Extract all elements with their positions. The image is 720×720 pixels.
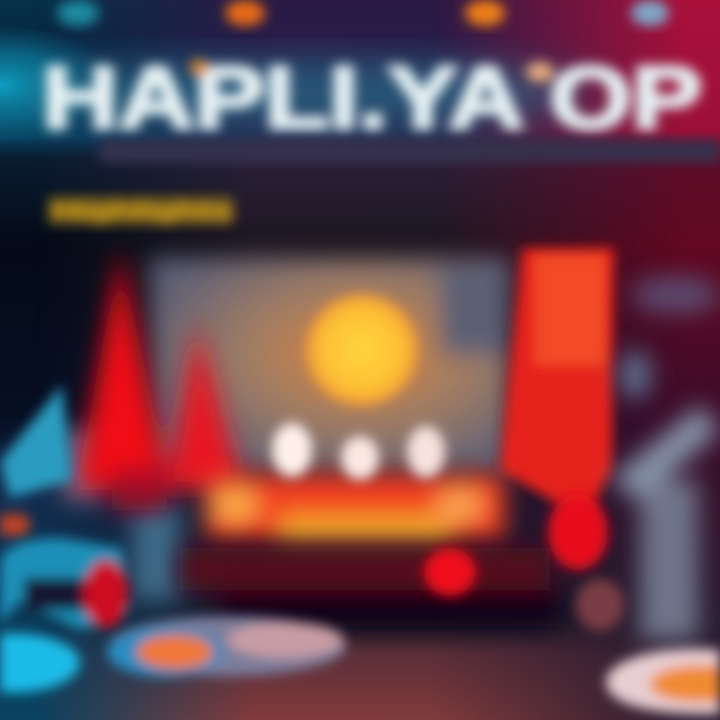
yellow label: Highlights <box>52 198 232 225</box>
left red peaks <box>76 250 244 510</box>
red lights <box>424 494 608 596</box>
left blue wedge <box>0 385 72 536</box>
right red block <box>500 248 614 520</box>
white blobs <box>272 423 445 480</box>
icon: sun <box>306 294 418 406</box>
title glow <box>30 62 590 122</box>
left cyan panel <box>0 538 128 630</box>
center panel <box>150 258 510 473</box>
divider strip <box>100 140 720 162</box>
top lights <box>57 0 669 26</box>
middle disc <box>107 616 346 677</box>
right disc <box>606 649 720 714</box>
yellow label <box>48 197 234 225</box>
small right object <box>576 579 624 631</box>
dark red base <box>180 548 560 626</box>
right grey column <box>610 277 720 640</box>
haze behind peaks <box>62 430 180 600</box>
cyan disc <box>0 633 80 693</box>
glowing orange stage <box>205 474 505 544</box>
title: HAPLI.YA OP <box>42 48 702 147</box>
